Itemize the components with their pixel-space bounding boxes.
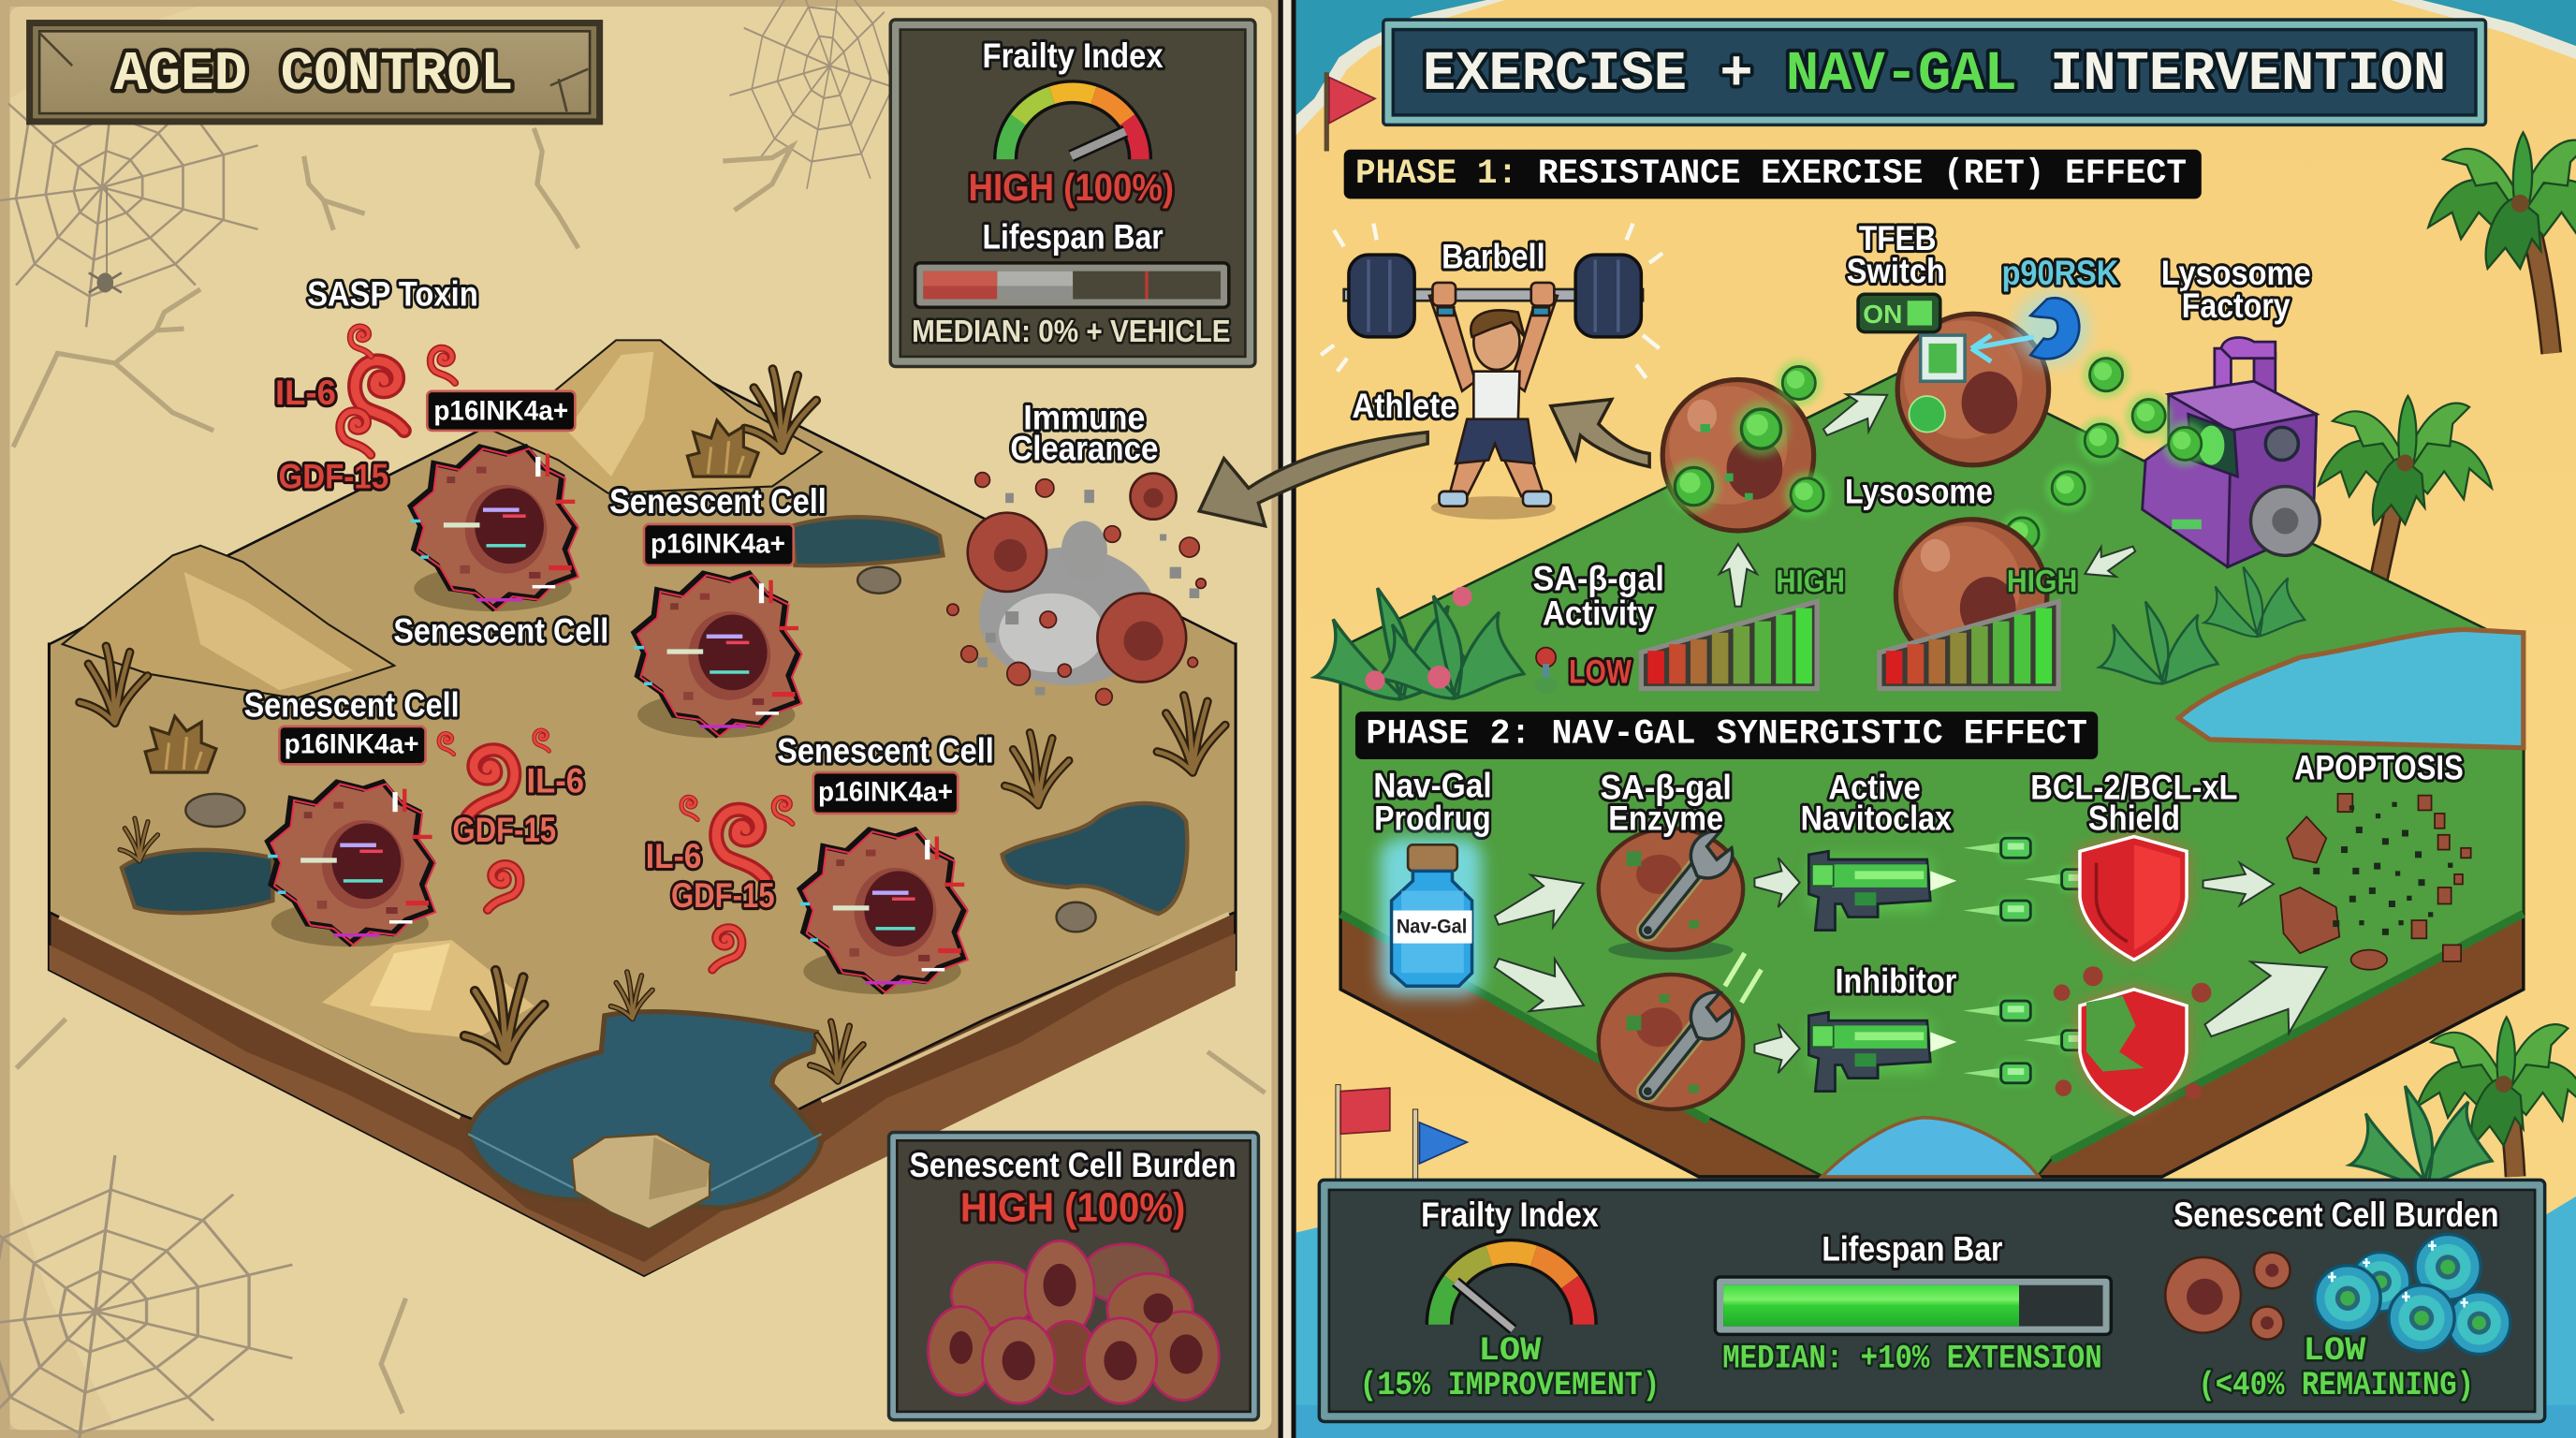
arrow: tan to athlete	[1551, 400, 1649, 467]
label: high right: HIGH	[2007, 565, 2077, 599]
rocks	[185, 567, 1096, 932]
arrow: to tfeb cell	[1814, 376, 1898, 451]
label: p90rsk: p90RSK	[2002, 254, 2119, 292]
label: barbell: Barbell	[1442, 237, 1545, 275]
apoptosis debris	[2280, 794, 2471, 970]
arrow: factory to cell	[2077, 535, 2142, 589]
label: nav-gal prodrug: Prodrug	[1374, 800, 1491, 838]
icon: nav-gal bottle	[1380, 838, 1482, 996]
pond: right	[1003, 803, 1187, 914]
tag: p16 right: p16INK4a+	[818, 777, 953, 808]
label: low: LOW	[1569, 653, 1632, 690]
heading: phase 2: PHASE 2: NAV-GAL SYNERGISTIC EFFECT	[1366, 715, 2087, 755]
icon: lysosome factory	[2143, 338, 2320, 567]
sasp toxin swirls: right	[681, 797, 792, 970]
lysosome particles	[1999, 352, 2172, 557]
icon: nav-gal bottle: Nav-Gal	[1397, 917, 1467, 938]
sand dune top	[493, 340, 822, 493]
label: high left: HIGH	[1776, 565, 1845, 599]
cell with lysosomes	[1662, 360, 1830, 531]
label: lysosome factory: Factory	[2182, 286, 2291, 325]
label: bcl-2 shield: Shield	[2088, 800, 2180, 838]
arrow: shield to apoptosis lower	[2189, 932, 2346, 1066]
arrow: activity up	[1720, 544, 1757, 607]
senescent cell: upper	[411, 447, 578, 611]
label: sa-beta-gal enzyme	[1600, 768, 1732, 838]
label: nav-gal prodrug: Nav-Gal	[1373, 767, 1492, 805]
activity meter left	[1641, 601, 1817, 689]
label: senescent cell right: Senescent Cell	[777, 732, 994, 770]
tag: p16 left: p16INK4a+	[285, 729, 419, 760]
enzyme cell upper	[1599, 829, 1743, 960]
label: lysosome factory	[2161, 254, 2311, 325]
flags: bottom red and blue	[1336, 1085, 1467, 1180]
shield: intact	[2080, 837, 2187, 960]
label: il-6 left: IL-6	[527, 761, 584, 800]
value: low improvement: LOW	[1479, 1332, 1542, 1370]
label: bcl-2 shield	[2030, 768, 2237, 838]
label: active navitoclax: Navitoclax	[1801, 800, 1952, 838]
plants	[1315, 566, 2305, 699]
heading: phase 1: PHASE 1: RESISTANCE EXERCISE (RET) EFFECT	[1355, 154, 2187, 194]
sasp toxin swirls: upper	[340, 327, 455, 455]
label: immune clearance	[1010, 398, 1158, 468]
panel: senescent cell burden aged	[889, 1132, 1258, 1420]
label: sa-beta-gal enzyme: Enzyme	[1608, 800, 1723, 838]
label: senescent cell left: Senescent Cell	[244, 686, 460, 725]
label: gdf-15 left: GDF-15	[453, 811, 556, 849]
label: il-6 upper: IL-6	[275, 374, 336, 412]
tag: p16 upper: p16INK4a+	[433, 395, 568, 426]
label: sa-beta-gal enzyme: SA-β-gal	[1600, 768, 1732, 806]
pond: left	[122, 850, 272, 913]
label: senescent cell upper: Senescent Cell	[393, 612, 608, 651]
cell pile	[929, 1240, 1219, 1403]
label: il-6 right: IL-6	[646, 837, 701, 875]
icon: p90rsk enzyme	[2016, 292, 2088, 365]
gauge: frailty high	[1005, 92, 1140, 159]
title: aged control: AGED CONTROL	[114, 42, 513, 106]
panel: intervention summary	[1319, 1180, 2545, 1421]
heading: lifespan bar: Lifespan Bar	[1822, 1230, 2002, 1269]
gauge: frailty low	[1439, 1253, 1584, 1329]
pellets	[1963, 835, 2095, 1086]
icon: lever	[1534, 648, 1558, 694]
value: low remaining: LOW	[2304, 1332, 2366, 1370]
label: active navitoclax	[1801, 768, 1952, 838]
label: bcl-2 shield: BCL-2/BCL-xL	[2030, 768, 2237, 806]
caption: median extension: MEDIAN: +10% EXTENSION	[1722, 1341, 2102, 1378]
value: low improvement: (15% IMPROVEMENT)	[1359, 1367, 1661, 1404]
arrow: bottle to enzyme lower	[1484, 937, 1597, 1032]
label: tfeb switch: Switch	[1847, 252, 1945, 290]
label: active navitoclax: Active	[1828, 768, 1921, 806]
pond: upper	[792, 517, 943, 565]
label: nav-gal prodrug	[1373, 767, 1492, 838]
label: athlete: Athlete	[1352, 387, 1457, 425]
icon: gun lower	[1808, 1012, 1956, 1092]
heading: senescent cell burden: Senescent Cell Burden	[909, 1146, 1237, 1184]
senescent cell: left	[268, 783, 435, 946]
label: sa-beta-gal activity: Activity	[1543, 594, 1655, 632]
label: senescent cell center: Senescent Cell	[609, 482, 827, 521]
enzyme cell lower	[1599, 953, 1761, 1109]
lagoon right	[2178, 629, 2524, 748]
caption: median vehicle: MEDIAN: 0% + VEHICLE	[912, 315, 1231, 349]
label: sa-beta-gal activity	[1533, 559, 1664, 632]
athlete lifting barbell	[1321, 224, 1662, 520]
flag: top red	[1325, 72, 1375, 151]
tag: p16 center: p16INK4a+	[651, 529, 785, 560]
panel: tropical intervention background	[1296, 0, 2576, 1438]
sasp toxin swirls: left	[439, 730, 549, 910]
label: inhibitor: Inhibitor	[1835, 961, 1956, 1000]
label: tfeb switch	[1847, 219, 1945, 290]
panel: barren isometric ground	[50, 340, 1236, 1275]
icons: remaining cells	[2165, 1234, 2510, 1354]
senescent cell: right	[800, 829, 968, 994]
lifespan bar: low	[915, 263, 1229, 307]
senescent cell: center	[634, 574, 801, 738]
label: tfeb switch: TFEB	[1859, 219, 1936, 257]
label: lysosome factory: Lysosome	[2161, 254, 2311, 292]
label: immune clearance: Immune	[1023, 398, 1145, 436]
switch: on	[1858, 294, 1940, 332]
title: aged control	[26, 20, 603, 125]
label: lysosome: Lysosome	[1845, 472, 1993, 510]
label: apoptosis: APOPTOSIS	[2294, 748, 2464, 786]
value: high 100 percent: HIGH (100%)	[969, 166, 1174, 209]
immune clearance explosion	[947, 473, 1206, 705]
divider between panels	[1278, 0, 1296, 1438]
panel: green isometric island	[1315, 357, 2524, 1177]
title: exercise plus nav-gal	[1383, 20, 2485, 125]
value: low improvement	[1359, 1332, 1661, 1404]
icon: gun upper	[1808, 851, 1956, 931]
cobweb and cracks background	[0, 0, 1265, 1438]
heading: frailty index: Frailty Index	[1421, 1196, 1599, 1234]
title: exercise plus nav-gal: EXERCISE + NAV-GAL INTERVENTION	[1423, 42, 2446, 106]
cell: lower phase 1	[1895, 520, 2047, 670]
label: immune clearance: Clearance	[1010, 430, 1158, 468]
arrow: bottle to enzyme upper	[1486, 858, 1595, 946]
switch: on: ON	[1863, 300, 1902, 329]
lifespan bar: extended	[1715, 1277, 2111, 1334]
lagoon lower	[1822, 1118, 2039, 1177]
label: sasp toxin: SASP Toxin	[307, 275, 478, 314]
dry plants	[80, 369, 1225, 1081]
value: low remaining: (<40% REMAINING)	[2198, 1367, 2474, 1404]
arrow: enzyme to navitoclax lower	[1754, 1024, 1800, 1073]
heading: frailty index: Frailty Index	[983, 37, 1164, 75]
label: gdf-15 upper: GDF-15	[278, 458, 388, 496]
shield: broken	[2054, 966, 2211, 1114]
panel: aged control background	[0, 0, 1280, 1438]
cell with tfeb switch	[1897, 314, 2049, 465]
heading: lifespan bar: Lifespan Bar	[983, 217, 1164, 256]
arrow: immune clearance curved	[1199, 433, 1427, 526]
sand dune left	[63, 546, 394, 698]
activity meter right	[1880, 601, 2058, 689]
heading: senescent cell burden: Senescent Cell Burden	[2174, 1196, 2499, 1234]
label: gdf-15 right: GDF-15	[671, 876, 775, 915]
label: sa-beta-gal activity: SA-β-gal	[1533, 559, 1664, 597]
barbell	[1344, 255, 1643, 337]
pond: large	[468, 1012, 822, 1208]
palm trees	[2319, 132, 2576, 1184]
value: low remaining	[2198, 1332, 2474, 1404]
value: high 100 percent: HIGH (100%)	[960, 1185, 1185, 1231]
arrow: enzyme to navitoclax upper	[1754, 858, 1800, 907]
arrow: shield to apoptosis upper	[2203, 863, 2274, 905]
panel: frailty index and lifespan	[890, 20, 1255, 366]
sand dune lower	[322, 940, 534, 1038]
